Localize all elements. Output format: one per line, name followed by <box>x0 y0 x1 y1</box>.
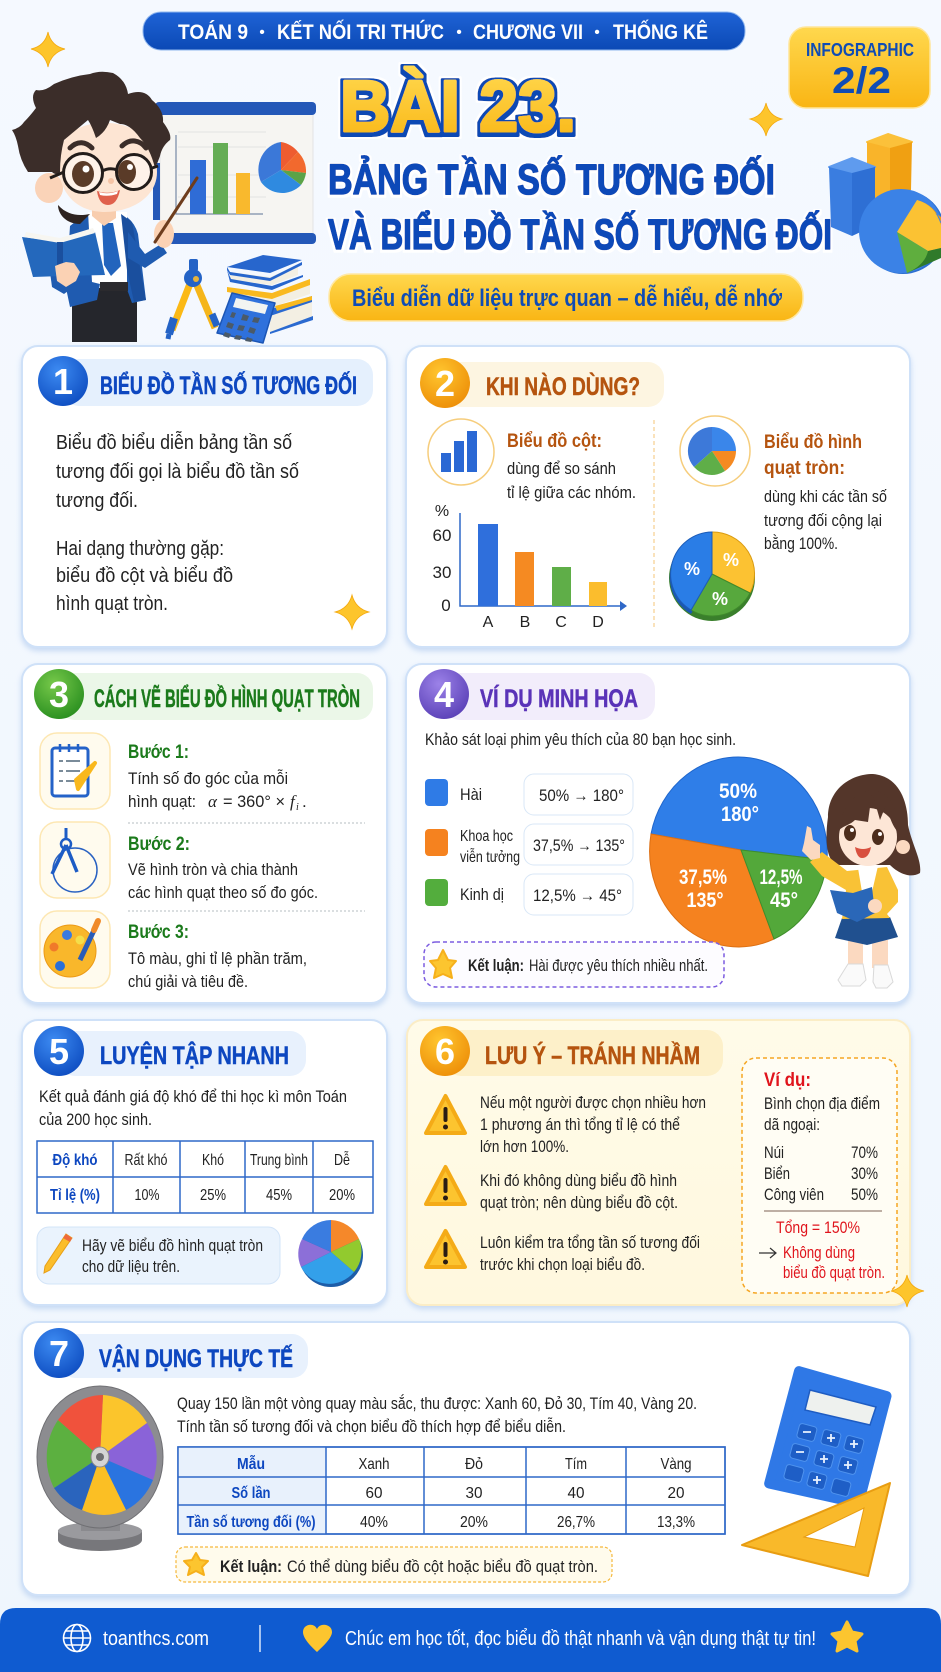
bar chart: A B C D: % <box>435 503 449 520</box>
pie chart: movie preferences: 135° <box>686 889 724 912</box>
spin results table: Xanh <box>358 1456 390 1473</box>
badge: infographic 2/2 <box>789 27 930 108</box>
bar chart: A B C D: C <box>555 614 567 631</box>
icon: star <box>430 950 456 978</box>
warning 3: trước khi chọn loại biểu đồ. <box>480 1255 645 1274</box>
heading: VẬN DỤNG THỰC TẾ <box>99 1343 293 1373</box>
conclusion callout <box>424 942 724 987</box>
example box: Tổng = 150% <box>776 1218 860 1237</box>
conclusion callout: Kết luận: <box>220 1557 282 1576</box>
bar chart: A B C D <box>433 503 627 631</box>
heading: 3 <box>49 674 69 715</box>
warning 2: quạt tròn; nên dùng biểu đồ cột. <box>480 1193 678 1212</box>
definition text: Hai dạng thường gặp: <box>56 538 224 560</box>
difficulty table <box>37 1141 373 1213</box>
problem statement: Quay 150 lần một vòng quay màu sắc, thu được: Xanh 60, Đỏ 30, Tím 40, Vàng 20. <box>177 1394 697 1413</box>
pie chart description: tương đối cộng lại <box>764 511 882 530</box>
example box: dã ngoại: <box>764 1115 820 1134</box>
heading <box>419 669 655 720</box>
example box: Biển <box>764 1164 790 1183</box>
bar chart: A B C D: 60 <box>433 526 451 545</box>
icon: heart <box>303 1625 332 1652</box>
website: toanthcs.com <box>103 1628 209 1650</box>
step 1: Tính số đo góc của mỗi <box>128 769 288 788</box>
pie chart: percent <box>669 532 755 621</box>
step 1: f <box>290 792 297 811</box>
difficulty table: Dễ <box>334 1150 350 1169</box>
step 1: . <box>302 792 307 811</box>
heading: 2 <box>435 363 455 404</box>
legend: comedy: Hài <box>460 785 482 804</box>
spin results table: Số lần <box>232 1485 270 1502</box>
heading: 4 <box>434 674 454 715</box>
subtitle pill: Biểu diễn dữ liệu trực quan – dễ hiểu, dễ nhớ <box>352 284 783 312</box>
task callout: Hãy vẽ biểu đồ hình quạt tròn <box>82 1236 263 1255</box>
spin results table: 26,7% <box>557 1514 595 1531</box>
illustration: set square <box>742 1483 890 1576</box>
heading: VÍ DỤ MINH HỌA <box>480 684 638 713</box>
step 1 <box>40 733 307 813</box>
pie chart description: quạt tròn: <box>764 458 845 479</box>
difficulty table: Độ khó <box>52 1152 98 1169</box>
top pill: course info <box>143 12 745 50</box>
icon: drawing compass <box>40 822 110 898</box>
bar chart: A B C D: 30 <box>433 563 451 582</box>
heading: 7 <box>49 1333 69 1374</box>
conclusion callout <box>176 1547 612 1582</box>
subtitle pill <box>329 274 803 321</box>
header banner <box>12 12 941 343</box>
panel 2: when to use <box>406 346 910 647</box>
step 2: Vẽ hình tròn và chia thành <box>128 860 298 879</box>
heading: CÁCH VẼ BIỂU ĐỒ HÌNH QUẠT TRÒN <box>94 683 360 713</box>
heading: LƯU Ý – TRÁNH NHẦM <box>485 1040 700 1070</box>
icon: globe <box>64 1624 90 1652</box>
badge: infographic 2/2: 2/2 <box>832 60 891 101</box>
badge: infographic 2/2: INFOGRAPHIC <box>806 40 914 60</box>
spin results table: 20% <box>460 1514 488 1531</box>
pie chart: movie preferences <box>650 757 827 947</box>
spin results table: 60 <box>366 1485 383 1502</box>
icon: paint palette <box>40 911 110 988</box>
illustration: stacked books <box>227 255 313 334</box>
task callout <box>37 1227 280 1284</box>
spin results table: 13,3% <box>657 1514 695 1531</box>
bar chart description: dùng để so sánh <box>507 459 616 478</box>
icon: sparkle right <box>750 103 782 136</box>
example box: Núi <box>764 1143 784 1162</box>
bar chart description: Biểu đồ cột: <box>507 431 602 452</box>
panel 5: quick practice <box>22 1020 387 1305</box>
conclusion callout: Kết luận: <box>468 957 524 975</box>
warning 3: Luôn kiểm tra tổng tần số tương đối <box>480 1233 700 1252</box>
step 1: = 360° × <box>223 792 285 811</box>
step 2 <box>40 822 318 902</box>
panel 6: notes and pitfalls <box>407 1020 924 1307</box>
conclusion callout: Có thể dùng biểu đồ cột hoặc biểu đồ quạt tròn. <box>287 1557 598 1576</box>
step 2: các hình quạt theo số đo góc. <box>128 883 318 902</box>
pie chart description: bằng 100%. <box>764 534 838 553</box>
step 2: Bước 2: <box>128 834 190 855</box>
pie chart description <box>764 432 887 553</box>
difficulty table: Rất khó <box>124 1152 168 1169</box>
top pill: course info: • <box>594 24 600 41</box>
difficulty table: Trung bình <box>250 1152 308 1169</box>
legend: comedy <box>425 774 633 815</box>
pie chart: movie preferences: 45° <box>770 889 798 912</box>
icon: warning <box>426 1096 465 1133</box>
panel 1: relative frequency chart definition <box>22 346 387 647</box>
pie chart: percent: % <box>712 589 728 609</box>
conclusion callout: Hài được yêu thích nhiều nhất. <box>529 957 708 975</box>
panel 4: worked example <box>406 664 920 1003</box>
spin results table: 30 <box>466 1485 483 1502</box>
icon: star <box>184 1553 208 1575</box>
title: line one: BẢNG TẦN SỐ TƯƠNG ĐỐI <box>328 155 775 204</box>
difficulty table: 10% <box>134 1187 160 1204</box>
illustration: whiteboard with charts <box>153 102 316 244</box>
pie chart: percent: % <box>684 559 700 579</box>
spin results table: Mẫu <box>237 1454 265 1473</box>
example box: Không dùng <box>783 1243 855 1262</box>
pie chart: percent: % <box>723 550 739 570</box>
heading: 1 <box>53 361 73 402</box>
difficulty table: 20% <box>329 1187 355 1204</box>
spin results table: Tần số tương đối (%) <box>186 1514 316 1531</box>
example box: 70% <box>851 1143 878 1162</box>
heading <box>34 1328 308 1378</box>
example box: Công viên <box>764 1185 824 1204</box>
spin results table: 40 <box>568 1485 585 1502</box>
definition text: biểu đồ cột và biểu đồ <box>56 565 233 587</box>
heading: BIỂU ĐỒ TẦN SỐ TƯƠNG ĐỐI <box>100 370 357 400</box>
spin results table: Tím <box>565 1456 587 1473</box>
icon: pie chart <box>680 416 750 486</box>
step 1: Bước 1: <box>128 742 189 763</box>
legend: horror: 12,5% → 45° <box>533 886 622 905</box>
heading <box>34 1026 306 1076</box>
icon: bar chart <box>428 419 494 485</box>
spin results table: 20 <box>668 1485 685 1502</box>
example box: 50% <box>851 1185 878 1204</box>
definition text: tương đối. <box>56 490 138 512</box>
warning 1: Nếu một người được chọn nhiều hơn <box>480 1093 706 1112</box>
pie chart: movie preferences: 50% <box>719 780 757 803</box>
footer bar <box>0 1608 941 1672</box>
step 3: Bước 3: <box>128 922 189 943</box>
pie chart: practice <box>298 1220 363 1287</box>
problem statement <box>39 1087 347 1129</box>
bar chart description <box>507 431 636 502</box>
example box: Ví dụ: <box>764 1070 811 1091</box>
definition text: Biểu đồ biểu diễn bảng tần số <box>56 431 292 454</box>
spin results table <box>178 1447 725 1534</box>
top pill: course info: CHƯƠNG VII <box>473 21 583 44</box>
step 1: α <box>208 792 218 811</box>
icon: pencil <box>44 1234 72 1273</box>
difficulty table: 25% <box>200 1187 226 1204</box>
warning 1 <box>426 1093 706 1156</box>
heading <box>38 356 373 406</box>
icon: sparkle left <box>31 32 65 67</box>
heading: LUYỆN TẬP NHANH <box>100 1040 289 1070</box>
step 3: chú giải và tiêu đề. <box>128 972 248 991</box>
spin results table: 40% <box>360 1514 388 1531</box>
illustration: calculator <box>769 1371 887 1503</box>
illustration: small calculator <box>217 293 275 343</box>
example box: biểu đồ quạt tròn. <box>783 1263 885 1282</box>
icon: checklist clipboard <box>40 733 110 809</box>
bar chart: A B C D: D <box>592 614 604 631</box>
heading: 5 <box>49 1031 69 1072</box>
illustration: girl pointing at the chart <box>802 774 920 988</box>
spin results table: Vàng <box>660 1456 692 1473</box>
spin results table: Đỏ <box>465 1456 483 1473</box>
heading: 6 <box>435 1031 455 1072</box>
icon: warning <box>426 1167 465 1204</box>
definition text <box>56 431 299 615</box>
pie chart: movie preferences: 180° <box>721 803 759 826</box>
difficulty table: Khó <box>202 1152 224 1169</box>
panel 7: real-life application <box>22 1322 910 1595</box>
warning 2 <box>426 1167 678 1212</box>
problem statement: của 200 học sinh. <box>39 1110 152 1129</box>
legend: science fiction: 37,5% → 135° <box>533 836 625 855</box>
icon: warning <box>426 1231 465 1267</box>
example box <box>742 1058 897 1293</box>
top pill: course info: TOÁN 9 <box>178 21 248 44</box>
problem statement: Kết quả đánh giá độ khó để thi học kì môn Toán <box>39 1087 347 1106</box>
illustration: 3D bars and pie <box>829 134 941 274</box>
closing message: Chúc em học tốt, đọc biểu đồ thật nhanh và vận dụng thật tự tin! <box>345 1628 816 1650</box>
heading <box>420 358 664 408</box>
difficulty table: Tỉ lệ (%) <box>50 1187 100 1204</box>
step 1: i <box>296 802 299 813</box>
heading <box>34 669 373 720</box>
example box: Bình chọn địa điểm <box>764 1094 880 1113</box>
warning 3 <box>426 1231 700 1274</box>
warning 1: 1 phương án thì tổng tỉ lệ có thể <box>480 1115 680 1134</box>
icon: sparkle <box>335 595 369 629</box>
bar chart: A B C D: B <box>520 614 530 631</box>
heading <box>420 1026 723 1076</box>
pie chart: movie preferences: 37,5% <box>679 866 727 889</box>
illustration: compass <box>168 259 217 339</box>
bar chart description: tỉ lệ giữa các nhóm. <box>507 483 636 502</box>
definition text: tương đối gọi là biểu đồ tần số <box>56 461 299 483</box>
legend: science fiction: viễn tưởng <box>460 847 520 866</box>
top pill: course info: • <box>456 24 462 41</box>
illustration: teacher character <box>12 72 197 342</box>
top pill: course info: KẾT NỐI TRI THỨC <box>277 20 444 44</box>
task callout: cho dữ liệu trên. <box>82 1257 180 1276</box>
step 3: Tô màu, ghi tỉ lệ phần trăm, <box>128 949 307 968</box>
legend: comedy: 50% → 180° <box>539 786 624 805</box>
difficulty table: 45% <box>266 1187 292 1204</box>
warning 1: lớn hơn 100%. <box>480 1137 569 1156</box>
illustration: colour wheel <box>37 1386 163 1551</box>
top pill: course info: • <box>259 24 265 41</box>
warning 2: Khi đó không dùng biểu đồ hình <box>480 1171 677 1190</box>
pie chart description: Biểu đồ hình <box>764 432 862 453</box>
survey statement: Khảo sát loại phim yêu thích của 80 bạn học sinh. <box>425 730 736 749</box>
legend: horror <box>425 874 633 915</box>
problem statement: Tính tần số tương đối và chọn biểu đồ thích hợp để biểu diễn. <box>177 1417 566 1436</box>
bar chart: A B C D: A <box>483 614 494 631</box>
top pill: course info: THỐNG KÊ <box>613 20 708 44</box>
example box: 30% <box>851 1164 878 1183</box>
bar chart: A B C D: 0 <box>441 596 451 615</box>
legend: science fiction: Khoa học <box>460 828 513 845</box>
step 1: hình quạt: <box>128 792 196 811</box>
pie chart: movie preferences: 12,5% <box>760 866 803 889</box>
step 3 <box>40 911 307 991</box>
title: lesson number: BÀI 23. <box>340 67 576 147</box>
heading: KHI NÀO DÙNG? <box>486 371 640 401</box>
pie chart description: dùng khi các tần số <box>764 487 887 506</box>
icon: star <box>832 1622 862 1651</box>
panel 3: how to draw a pie chart <box>22 664 387 1003</box>
legend: horror: Kinh dị <box>460 885 504 904</box>
icon: sparkle <box>891 1275 924 1307</box>
problem statement <box>177 1394 697 1436</box>
definition text: hình quạt tròn. <box>56 593 168 615</box>
legend: science fiction <box>425 824 633 866</box>
